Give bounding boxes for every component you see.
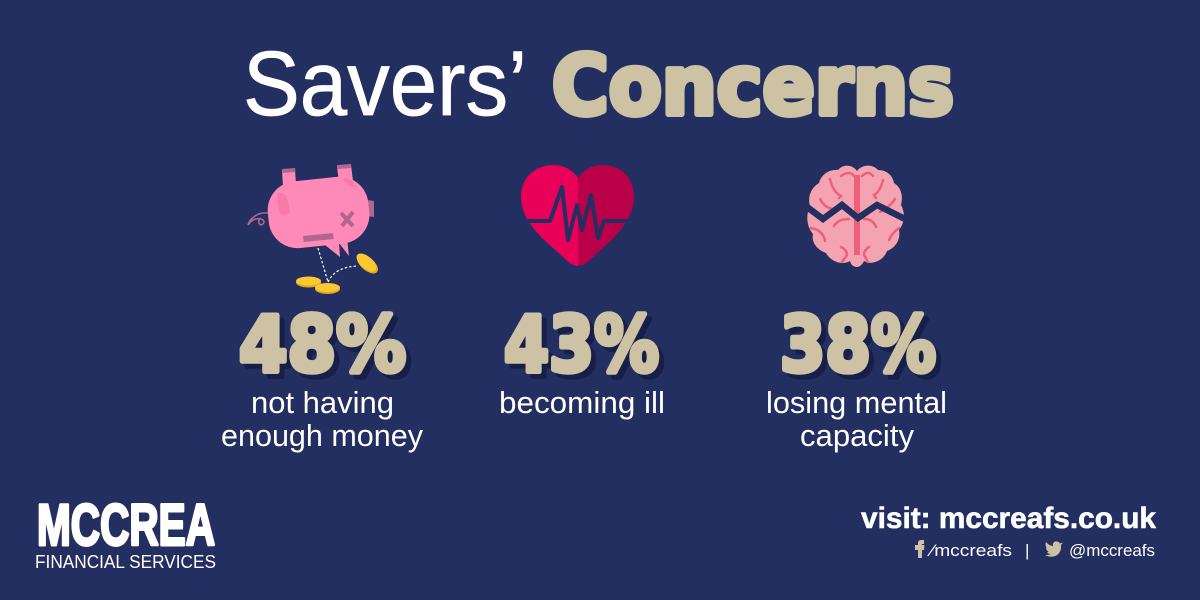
icon: facebook: [915, 540, 924, 558]
social links: |: [1025, 541, 1029, 560]
stat: 48%: 48%: [239, 301, 406, 390]
icon: broken piggy bank: [248, 164, 381, 294]
title: [243, 33, 954, 135]
logo: McCrea Financial Services: MCCREA: [37, 493, 215, 558]
stat: 38%: 38%: [780, 301, 936, 390]
stat: 48%: 48%: [244, 306, 411, 395]
stat: 43%: 43%: [504, 301, 659, 390]
label: becoming ill: becoming ill: [499, 385, 665, 420]
social links: ⁄mccreafs: [926, 541, 1012, 560]
logo: McCrea Financial Services: [35, 493, 216, 572]
title: Savers’: [243, 33, 527, 135]
label: losing mental capacity: losing mental: [766, 385, 947, 420]
logo: McCrea Financial Services: FINANCIAL SERVICES: [35, 551, 216, 572]
label: losing mental capacity: capacity: [800, 418, 914, 453]
stat: 38%: 38%: [785, 306, 941, 395]
stat: 43%: 43%: [509, 306, 664, 395]
stat: 43%: [499, 301, 665, 420]
website: visit: mccreafs.co.uk: [861, 502, 1156, 535]
stat: 48%: [221, 301, 423, 453]
title: Concerns: [552, 39, 954, 134]
icon: heart with pulse: [521, 165, 634, 266]
label: not having enough money: enough money: [221, 418, 423, 453]
stat: 38%: [766, 301, 947, 453]
social links: @mccreafs: [1069, 541, 1155, 560]
icon: cracked brain: [807, 166, 905, 267]
social links: [915, 540, 1155, 560]
icon: twitter: [1045, 541, 1063, 557]
label: not having enough money: not having: [251, 385, 394, 420]
